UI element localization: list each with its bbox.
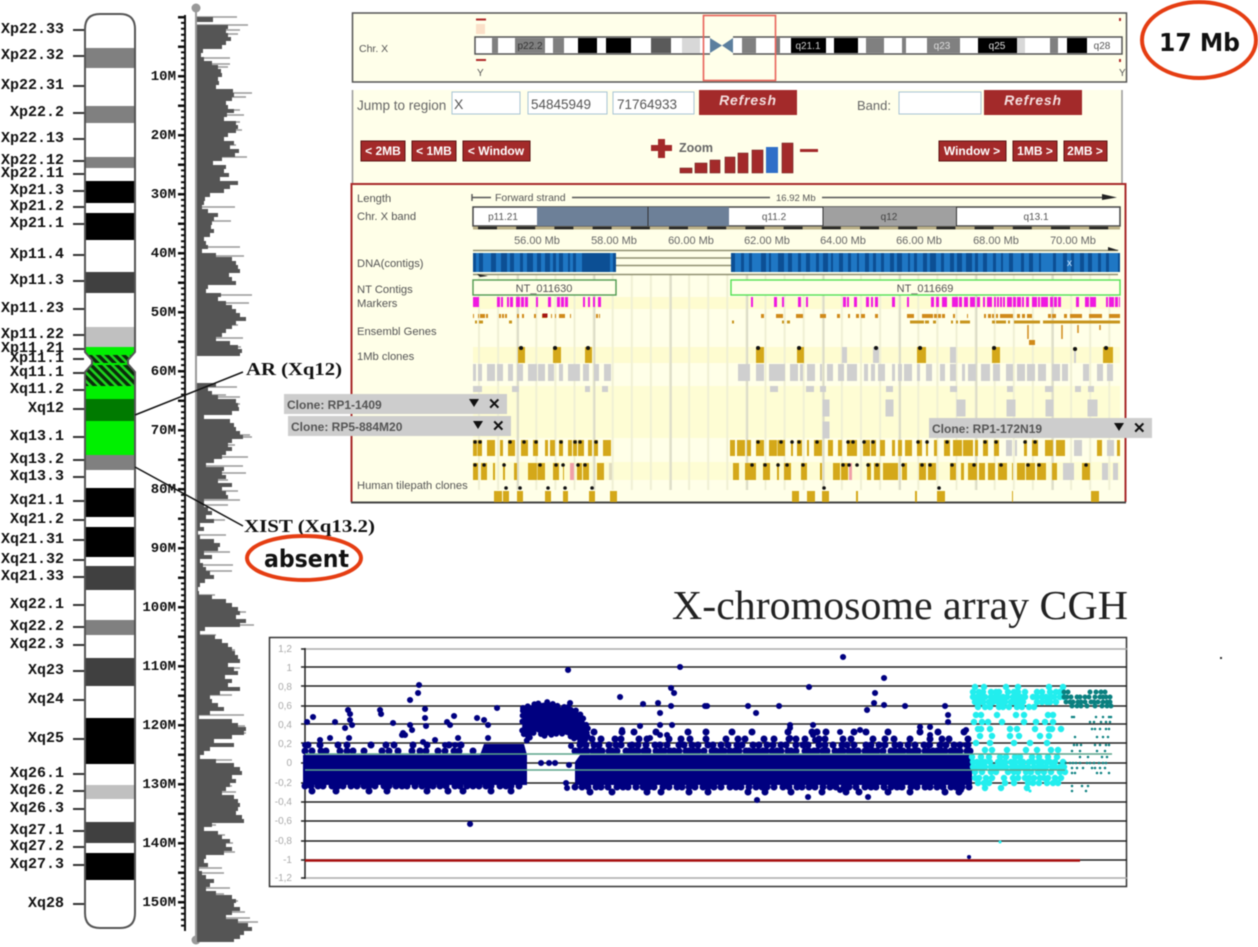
band labels: Xq22.3	[10, 636, 64, 653]
band labels: Xq11.2	[10, 381, 64, 398]
band labels: Xq22.2	[10, 618, 64, 635]
form background	[352, 90, 1122, 184]
zoom control	[651, 139, 818, 173]
ruler labels: 10M	[151, 69, 176, 85]
ruler labels: 130M	[142, 777, 176, 793]
length ruler	[472, 192, 1117, 204]
band labels: Xq21.2	[10, 511, 64, 528]
band labels: Xp22.11	[1, 165, 64, 182]
Y labels	[477, 68, 1126, 79]
ruler labels: 30M	[151, 187, 176, 203]
track labels	[357, 193, 468, 492]
y axis labels: 0,4	[278, 720, 292, 731]
scale labels: 70.00 Mb	[1050, 235, 1096, 247]
scale labels: 66.00 Mb	[896, 235, 942, 247]
band labels: Xp21.2	[10, 198, 64, 215]
gridlines	[305, 667, 1127, 860]
pan buttons: 1MB >	[1017, 144, 1053, 158]
chromosome ideogram	[1, 14, 136, 928]
tilepath clone row 3	[494, 491, 1099, 502]
band ticks	[73, 30, 85, 904]
histogram axis with end dots	[192, 4, 200, 944]
track labels: Human tilepath clones	[357, 480, 468, 492]
band labels: Xp22.31	[1, 77, 64, 94]
navy outlier dots	[305, 657, 966, 824]
pseudoautosomal markers	[476, 18, 1120, 62]
band labels: Xq21.32	[1, 551, 64, 568]
top and bottom gridlines	[305, 649, 1127, 878]
track labels: NT Contigs	[357, 284, 413, 296]
band labels: Xp22.12	[1, 152, 64, 169]
ruler labels: 40M	[151, 246, 176, 262]
DNA contig track: x	[1067, 258, 1072, 269]
scale bar	[473, 226, 1120, 230]
track labels: 1Mb clones	[357, 351, 415, 363]
cyan series	[972, 687, 1066, 842]
band track	[473, 207, 1120, 226]
band labels: Xp11.1	[10, 350, 64, 367]
overview ideogram strip: q23	[934, 41, 951, 52]
panel: contig view	[351, 184, 1126, 502]
y axis labels: 0,8	[278, 682, 292, 693]
Y labels: Y	[477, 68, 484, 79]
pan buttons: < Window	[468, 144, 525, 158]
ruler labels: 20M	[151, 128, 176, 144]
band labels: Xq23	[28, 662, 64, 679]
band labels: Xq27.1	[10, 822, 64, 839]
gene density histogram	[192, 4, 258, 944]
band labels: Xp11.4	[10, 246, 64, 263]
y axis labels: -1,2	[275, 873, 292, 884]
label: XIST: XIST (Xq13.2)	[244, 516, 375, 537]
navy dense band	[303, 744, 972, 785]
jump controls: X	[454, 96, 464, 112]
ruler labels: 140M	[142, 836, 176, 852]
track labels: Ensembl Genes	[357, 326, 437, 338]
ruler labels	[142, 69, 176, 911]
band labels: Xp21.1	[10, 215, 64, 232]
PAR fill	[476, 24, 485, 34]
gene track	[473, 314, 1120, 345]
DNA contig track	[473, 247, 1120, 277]
track labels: DNA(contigs)	[357, 258, 424, 270]
centromere notches	[84, 352, 136, 372]
band track: q12	[881, 212, 898, 223]
chart frame	[270, 638, 1126, 886]
callout: absent: absent	[264, 545, 349, 573]
overview ideogram strip: p22.2	[517, 41, 543, 52]
ruler labels: 110M	[142, 659, 176, 675]
band labels: Xp22.33	[1, 21, 64, 38]
teal series	[1064, 692, 1112, 791]
popup: clone RP5-884M20	[288, 416, 511, 436]
y axis labels: -0,6	[275, 816, 292, 827]
panel background	[352, 184, 1125, 502]
ruler axis	[184, 15, 186, 931]
y axis labels: 0,6	[278, 701, 292, 712]
length ruler: 16.92 Mb	[776, 193, 816, 204]
track labels: Chr. X band	[357, 211, 416, 223]
jump controls: 54845949	[531, 97, 591, 112]
scale labels: 60.00 Mb	[668, 235, 714, 247]
y axis labels: -0,4	[275, 797, 292, 808]
band track: p11.21	[488, 212, 518, 223]
tilepath clone row 2	[473, 463, 1118, 480]
band labels: Xq12	[28, 400, 64, 417]
scale labels: 58.00 Mb	[591, 235, 637, 247]
ruler labels: 100M	[142, 600, 176, 616]
pale track stripes	[473, 297, 1120, 480]
y axis labels: -0,2	[275, 778, 292, 789]
ruler labels: 90M	[151, 541, 176, 557]
band labels: Xq13.2	[10, 451, 64, 468]
y axis	[301, 648, 305, 879]
stray dot	[1220, 657, 1222, 659]
ruler labels: 60M	[151, 364, 176, 380]
overview label: Chr. X	[359, 43, 388, 55]
popup: clone RP1-172N19: Clone: RP1-172N19	[932, 422, 1042, 436]
scale labels	[514, 235, 1096, 247]
y axis labels: -1	[283, 855, 292, 866]
navy high cluster	[522, 702, 590, 743]
y axis labels: 1	[286, 663, 292, 674]
marker track	[473, 297, 1120, 307]
minor ticks	[181, 16, 185, 930]
overview background	[352, 13, 1126, 82]
overview ideogram strip: q28	[1094, 41, 1111, 52]
band labels: Xp11.22	[1, 326, 64, 343]
jump controls: Refresh	[719, 92, 777, 108]
band labels: Xp22.2	[10, 104, 64, 121]
band labels: Xq13.1	[10, 428, 64, 445]
scatter chart: array CGH	[270, 638, 1127, 886]
y axis labels: 0	[286, 758, 292, 769]
band labels: Xq22.1	[10, 596, 64, 613]
popup: clone RP1-1409: Clone: RP1-1409	[287, 398, 382, 412]
band track: q13.1	[1023, 212, 1049, 223]
track labels: Markers	[357, 298, 398, 310]
navy fringe dots	[305, 732, 972, 792]
band labels: Xq26.1	[10, 765, 64, 782]
tilepath clone row 1	[473, 440, 1120, 456]
overview ideogram strip: q25	[989, 41, 1006, 52]
pan buttons: < 2MB	[365, 144, 401, 158]
major ticks	[178, 16, 185, 930]
band labels: Xq27.2	[10, 838, 64, 855]
gray clone rows	[473, 372, 1113, 438]
band labels: Xq28	[28, 895, 64, 912]
title: X-chromosome array CGH	[672, 582, 1128, 628]
overview ideogram strip: q21.1	[795, 41, 821, 52]
megabase ruler	[142, 15, 185, 931]
zoom control: Zoom	[679, 141, 713, 155]
pan buttons: < 1MB	[416, 144, 452, 158]
band labels: Xq21.33	[1, 568, 64, 585]
band labels: Xp11.23	[1, 300, 64, 317]
histogram tips	[197, 17, 258, 922]
pan buttons	[361, 141, 1107, 161]
jump controls	[357, 90, 1082, 115]
popup: clone RP1-172N19	[929, 418, 1152, 438]
band labels: Xq11.1	[10, 364, 64, 381]
ruler labels: 70M	[151, 423, 176, 439]
ruler labels: 150M	[142, 895, 176, 911]
ruler labels: 80M	[151, 482, 176, 498]
chromosome outline	[85, 14, 135, 928]
form side borders	[352, 90, 1122, 184]
ruler labels: 120M	[142, 718, 176, 734]
jump controls: 71764933	[617, 97, 677, 112]
length ruler: Forward strand	[495, 192, 566, 204]
1Mb clone track	[518, 347, 1113, 363]
band track: q11.2	[762, 212, 787, 223]
jump controls: Jump to region	[357, 98, 446, 113]
pan buttons: Window >	[944, 144, 1000, 158]
popup: clone RP1-1409: ✕	[488, 396, 501, 413]
NT contig track	[473, 280, 1120, 295]
callout: 17 Mb	[1142, 2, 1256, 78]
overview ideogram strip	[475, 36, 1122, 55]
band labels: Xp22.32	[1, 47, 64, 64]
popup: clone RP1-172N19: ✕	[1133, 420, 1146, 437]
scale labels: 62.00 Mb	[744, 235, 790, 247]
y axis labels: 0,2	[278, 739, 292, 750]
jump controls: Refresh	[1004, 92, 1062, 108]
band labels: Xq26.3	[10, 800, 64, 817]
isolated low dots	[967, 855, 971, 859]
scale labels: 64.00 Mb	[820, 235, 866, 247]
popup: clone RP5-884M20: Clone: RP5-884M20	[291, 420, 403, 434]
popup: clone RP5-884M20: ✕	[492, 418, 505, 435]
band labels: Xq26.2	[10, 782, 64, 799]
NT contig track: NT_011669	[897, 283, 953, 295]
scale labels: 56.00 Mb	[514, 235, 560, 247]
band labels: Xq25	[28, 730, 64, 747]
selected region box	[704, 16, 776, 80]
popup: clone RP1-1409	[284, 394, 507, 414]
panel border	[352, 184, 1126, 502]
green average lines	[305, 754, 1112, 770]
band labels: Xp11.3	[10, 272, 64, 289]
ruler labels: 50M	[151, 305, 176, 321]
NT contig track: NT_011630	[516, 283, 572, 295]
band labels: Xq21.1	[10, 492, 64, 509]
y axis labels: 1,2	[278, 644, 292, 655]
track labels: Length	[357, 193, 391, 205]
band labels: Xq24	[28, 691, 64, 708]
Y labels: Y	[1119, 68, 1126, 79]
band labels: Xq21.31	[1, 531, 64, 548]
chromosome bands	[85, 14, 135, 928]
band labels: Xp11.21	[1, 340, 64, 357]
panel: navigation form	[352, 90, 1122, 184]
y axis labels	[275, 644, 292, 884]
y axis labels: -0,8	[275, 836, 292, 847]
gene callout lines	[135, 372, 243, 526]
band labels: Xp21.3	[10, 182, 64, 199]
band labels	[1, 21, 64, 912]
callout: 17 Mb: 17 Mb	[1159, 28, 1240, 57]
panel: chromosome overview	[352, 13, 1126, 82]
label: AR: AR (Xq12)	[246, 359, 342, 380]
band labels: Xq13.3	[10, 468, 64, 485]
pan buttons: 2MB >	[1067, 144, 1103, 158]
histogram bars	[197, 17, 252, 942]
band labels: Xp22.13	[1, 130, 64, 147]
jump controls: Band:	[857, 98, 891, 113]
clone end markers	[475, 442, 1086, 488]
band labels: Xq27.3	[10, 856, 64, 873]
red threshold line	[305, 859, 1080, 862]
scale labels: 68.00 Mb	[973, 235, 1019, 247]
callout: absent	[247, 536, 361, 580]
panel bottom edge	[351, 502, 1126, 504]
